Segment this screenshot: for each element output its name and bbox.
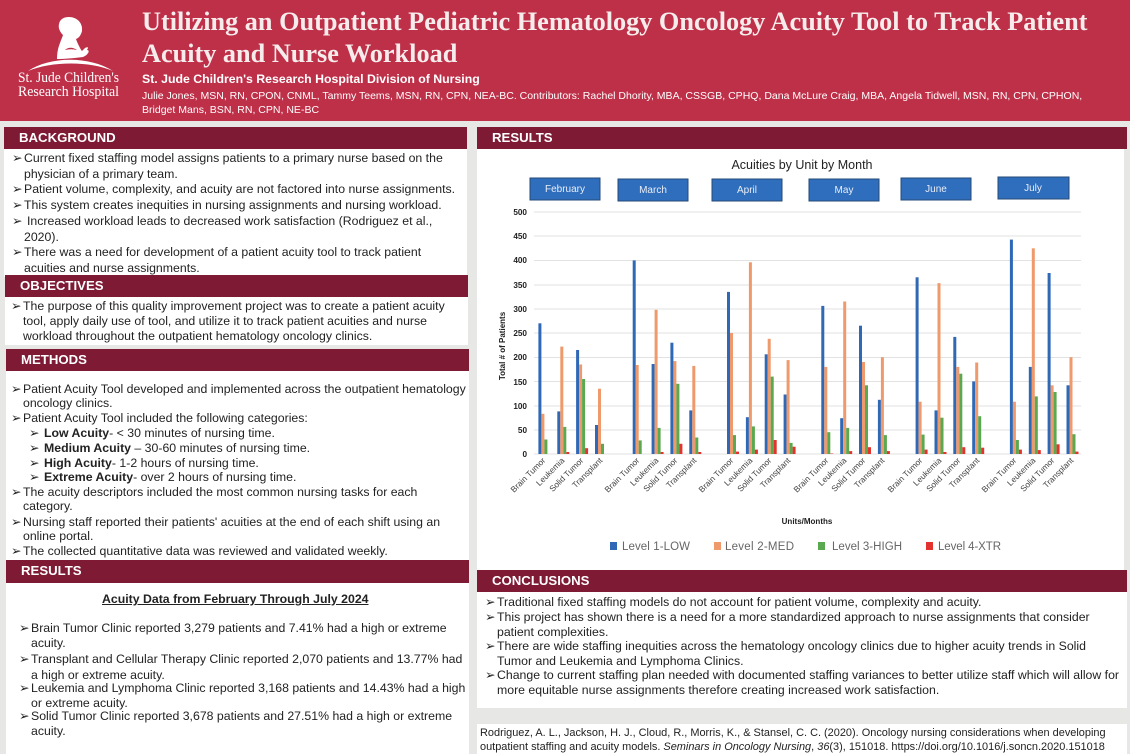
- conclusions text: ➢: [485, 668, 495, 682]
- month labels: March: [639, 185, 667, 196]
- x axis category labels: Brain Tumor: [979, 455, 1019, 494]
- background text: ➢: [12, 214, 22, 228]
- background text: physician of a primary team.: [24, 167, 178, 181]
- authors: Julie Jones, MSN, RN, CPON, CNML, Tammy Teems, MSN, RN, CPN, NEA-BC. Contributors: Rachel Dhority, MBA, CSSGB, CPHQ, Dana McLure Craig, MBA, Angela Tidwell, MSN, RN, CPN, CPHON,: [142, 90, 1082, 102]
- conclusions text: Change to current staffing plan needed with documented staffing variances to better utilize staff which will allow for: [497, 668, 1119, 682]
- x axis category labels: Transplant: [947, 455, 982, 490]
- methods text: Patient Acuity Tool developed and implemented across the outpatient hematology: [23, 382, 466, 396]
- x axis category labels: Transplant: [664, 455, 699, 490]
- x axis category labels: Leukemia: [816, 455, 849, 488]
- x axis category labels: Solid Tumor: [829, 455, 868, 494]
- conclusions text: more equitable nurse assignments therefore creating increased work satisfaction.: [497, 683, 939, 697]
- bars: Level 2 medium: [541, 248, 1072, 454]
- heading: objectives: [5, 275, 468, 297]
- legend: Level 3-HIGH: [832, 541, 902, 553]
- background text: [12, 151, 455, 275]
- legend: Level 4-XTR: [938, 541, 1001, 553]
- panel: objectives: [5, 275, 468, 345]
- background text: Current fixed staffing model assigns patients to a primary nurse based on the: [24, 151, 443, 165]
- reference citation: outpatient staffing and acuity models. Seminars in Oncology Nursing, 36(3), 151018. https://doi.org/10.1016/j.soncn.2020.151018: [480, 740, 1105, 752]
- results text: Transplant and Cellular Therapy Clinic reported 2,070 patients and 13.77% had: [31, 652, 462, 666]
- x axis category labels: Solid Tumor: [641, 455, 680, 494]
- x axis category labels: [508, 455, 1076, 494]
- x axis category labels: Transplant: [1041, 455, 1076, 490]
- bars: Level 4 extreme: [566, 440, 1078, 454]
- chart: acuities by unit by month: [498, 158, 1081, 553]
- conclusions text: ➢: [485, 610, 495, 624]
- heading: results right: [477, 127, 1127, 149]
- conclusions text: There are wide staffing inequities across the hematology oncology clinics due to higher acuity trends in Solid: [497, 639, 1086, 653]
- heading: background: BACKGROUND: [19, 130, 116, 145]
- conclusions text: [485, 595, 1119, 697]
- methods text: ➢: [11, 382, 21, 396]
- methods text: ➢: [11, 485, 21, 499]
- x axis category labels: Leukemia: [911, 455, 944, 488]
- heading: results left: RESULTS: [21, 563, 82, 578]
- heading: conclusions: CONCLUSIONS: [492, 573, 589, 588]
- conclusions text: ➢: [485, 639, 495, 653]
- panel: results chart: [477, 127, 1124, 571]
- methods text: ➢: [29, 470, 39, 484]
- results text: ➢: [19, 621, 29, 635]
- y axis labels: 150: [513, 378, 527, 387]
- y axis labels: 100: [513, 402, 527, 411]
- acuity data subheading: Acuity Data from February Through July 2024: [102, 592, 368, 606]
- methods text: Low Acuity- < 30 minutes of nursing time.: [44, 426, 275, 440]
- x axis category labels: Leukemia: [628, 455, 661, 488]
- y axis title: Total # of Patients: [498, 311, 507, 380]
- objectives text: The purpose of this quality improvement project was to create a patient acuity: [23, 299, 445, 313]
- results text: [19, 621, 465, 738]
- x axis category labels: Leukemia: [1005, 455, 1038, 488]
- heading: methods: METHODS: [21, 352, 87, 367]
- x axis category labels: Transplant: [852, 455, 887, 490]
- methods text: ➢: [29, 441, 39, 455]
- objectives text: [11, 299, 445, 343]
- background text: Increased workload leads to decreased work satisfaction (Rodriguez et al.,: [27, 214, 432, 228]
- conclusions text: This project has shown there is a need for a more standardized approach to nurse assignments that consider: [497, 610, 1090, 624]
- methods text: The collected quantitative data was reviewed and validated weekly.: [23, 544, 388, 558]
- heading: conclusions: [477, 570, 1127, 592]
- background text: Patient volume, complexity, and acuity are not factored into nurse assignments.: [24, 182, 455, 196]
- methods text: Extreme Acuity- over 2 hours of nursing time.: [44, 470, 296, 484]
- methods text: [11, 382, 466, 558]
- authors: Bridget Mans, BSN, RN, CPN, NE-BC: [142, 104, 319, 116]
- panel: methods: [6, 349, 469, 560]
- methods text: oncology clinics.: [23, 396, 113, 410]
- month labels: February: [545, 184, 585, 195]
- title: Utilizing an Outpatient Pediatric Hematology Oncology Acuity Tool to Track Patient: [142, 7, 1087, 36]
- x axis category labels: Transplant: [570, 455, 605, 490]
- background text: ➢: [12, 151, 22, 165]
- background text: acuities and nurse assignments.: [24, 261, 200, 275]
- panel: conclusions: [477, 570, 1127, 708]
- legend: [610, 541, 1001, 553]
- y axis labels: [513, 208, 527, 459]
- methods text: ➢: [11, 411, 21, 425]
- bars: Level 3 high: [544, 374, 1076, 454]
- x axis category labels: Brain Tumor: [602, 455, 642, 494]
- methods text: online portal.: [23, 529, 93, 543]
- x axis category labels: Brain Tumor: [885, 455, 925, 494]
- grid lines: [534, 212, 1081, 454]
- y axis labels: 350: [513, 281, 527, 290]
- heading: objectives: OBJECTIVES: [20, 278, 104, 293]
- x axis category labels: Solid Tumor: [547, 455, 586, 494]
- heading: results right: RESULTS: [492, 130, 553, 145]
- methods text: category.: [23, 499, 73, 513]
- methods text: ➢: [11, 544, 21, 558]
- conclusions text: patient complexities.: [497, 625, 608, 639]
- month labels: July: [1024, 183, 1042, 194]
- methods text: The acuity descriptors included the most common nursing tasks for each: [23, 485, 417, 499]
- reference citation: Rodriguez, A. L., Jackson, H. J., Cloud, R., Morris, K., & Stansel, C. C. (2020). Oncology nursing considerations when developing: [480, 727, 1106, 739]
- results text: acuity.: [31, 724, 66, 738]
- header banner: [0, 0, 1130, 121]
- y axis labels: 300: [513, 305, 527, 314]
- results text: a high or extreme acuity.: [31, 668, 165, 682]
- y axis labels: 250: [513, 329, 527, 338]
- conclusions text: ➢: [485, 595, 495, 609]
- legend: Level 2-MED: [725, 541, 794, 553]
- title: [142, 7, 1088, 68]
- month labels: [530, 177, 1069, 201]
- bars: Level 1 low: [538, 240, 1070, 454]
- y axis labels: 200: [513, 353, 527, 362]
- background text: ➢: [12, 182, 22, 196]
- results text: ➢: [19, 709, 29, 723]
- x axis category labels: Brain Tumor: [508, 455, 548, 494]
- results text: ➢: [19, 681, 29, 695]
- conclusions text: Traditional fixed staffing models do not account for patient volume, complexity and acuity.: [497, 595, 981, 609]
- panel: background: [4, 127, 467, 277]
- background text: There was a need for development of a patient acuity tool to track patient: [24, 245, 421, 259]
- y axis labels: 50: [518, 426, 527, 435]
- y axis labels: 500: [513, 208, 527, 217]
- background text: 2020).: [24, 230, 59, 244]
- results text: or extreme acuity.: [31, 696, 128, 710]
- chart title: Acuities by Unit by Month: [731, 158, 873, 172]
- reference citation: [477, 724, 1127, 754]
- results text: Leukemia and Lymphoma Clinic reported 3,168 patients and 14.43% had a high: [31, 681, 465, 695]
- title: Acuity and Nurse Workload: [142, 39, 457, 68]
- month labels: April: [737, 185, 757, 196]
- y axis labels: 400: [513, 256, 527, 265]
- logo: St. Jude: Research Hospital: [18, 84, 119, 100]
- background text: ➢: [12, 198, 22, 212]
- month labels: June: [925, 184, 947, 195]
- objectives text: workload throughout the outpatient hematology oncology clinics.: [23, 329, 372, 343]
- objectives text: tool, apply daily use of tool, and utilize it to track patient acuities and nurse: [23, 314, 427, 328]
- y axis labels: 450: [513, 232, 527, 241]
- panel: results left: [6, 560, 469, 754]
- x axis category labels: Solid Tumor: [924, 455, 963, 494]
- results text: ➢: [19, 652, 29, 666]
- methods text: Nursing staff reported their patients' acuities at the end of each shift using an: [23, 515, 440, 529]
- heading: results left: [6, 560, 469, 583]
- x axis category labels: Brain Tumor: [791, 455, 831, 494]
- heading: background: [4, 127, 467, 149]
- methods text: Medium Acuity – 30-60 minutes of nursing time.: [44, 441, 310, 455]
- results text: acuity.: [31, 636, 66, 650]
- x axis category labels: Leukemia: [534, 455, 567, 488]
- x axis category labels: Solid Tumor: [1018, 455, 1057, 494]
- methods text: Patient Acuity Tool included the following categories:: [23, 411, 308, 425]
- logo: St. Jude: St. Jude Children's: [18, 70, 119, 86]
- heading: methods: [6, 349, 469, 371]
- x axis category labels: Transplant: [758, 455, 793, 490]
- legend: Level 1-LOW: [622, 541, 690, 553]
- objectives text: ➢: [11, 299, 21, 313]
- month labels: May: [835, 185, 853, 196]
- methods text: ➢: [11, 515, 21, 529]
- results text: Solid Tumor Clinic reported 3,678 patients and 27.51% had a high or extreme: [31, 709, 452, 723]
- background text: This system creates inequities in nursing assignments and nursing workload.: [24, 198, 442, 212]
- subtitle: St. Jude Children's Research Hospital Division of Nursing: [142, 72, 480, 86]
- x axis category labels: Solid Tumor: [735, 455, 774, 494]
- methods text: ➢: [29, 426, 39, 440]
- methods text: High Acuity- 1-2 hours of nursing time.: [44, 456, 259, 470]
- x axis category labels: Brain Tumor: [696, 455, 736, 494]
- results text: Brain Tumor Clinic reported 3,279 patients and 7.41% had a high or extreme: [31, 621, 447, 635]
- conclusions text: Tumor and Leukemia and Lymphoma Clinics.: [497, 654, 744, 668]
- x axis title: Units/Months: [782, 517, 833, 526]
- x axis category labels: Leukemia: [722, 455, 755, 488]
- y axis labels: 0: [522, 450, 527, 459]
- logo: St. Jude: [18, 17, 119, 100]
- methods text: ➢: [29, 456, 39, 470]
- authors: [142, 90, 1082, 116]
- background text: ➢: [12, 245, 22, 259]
